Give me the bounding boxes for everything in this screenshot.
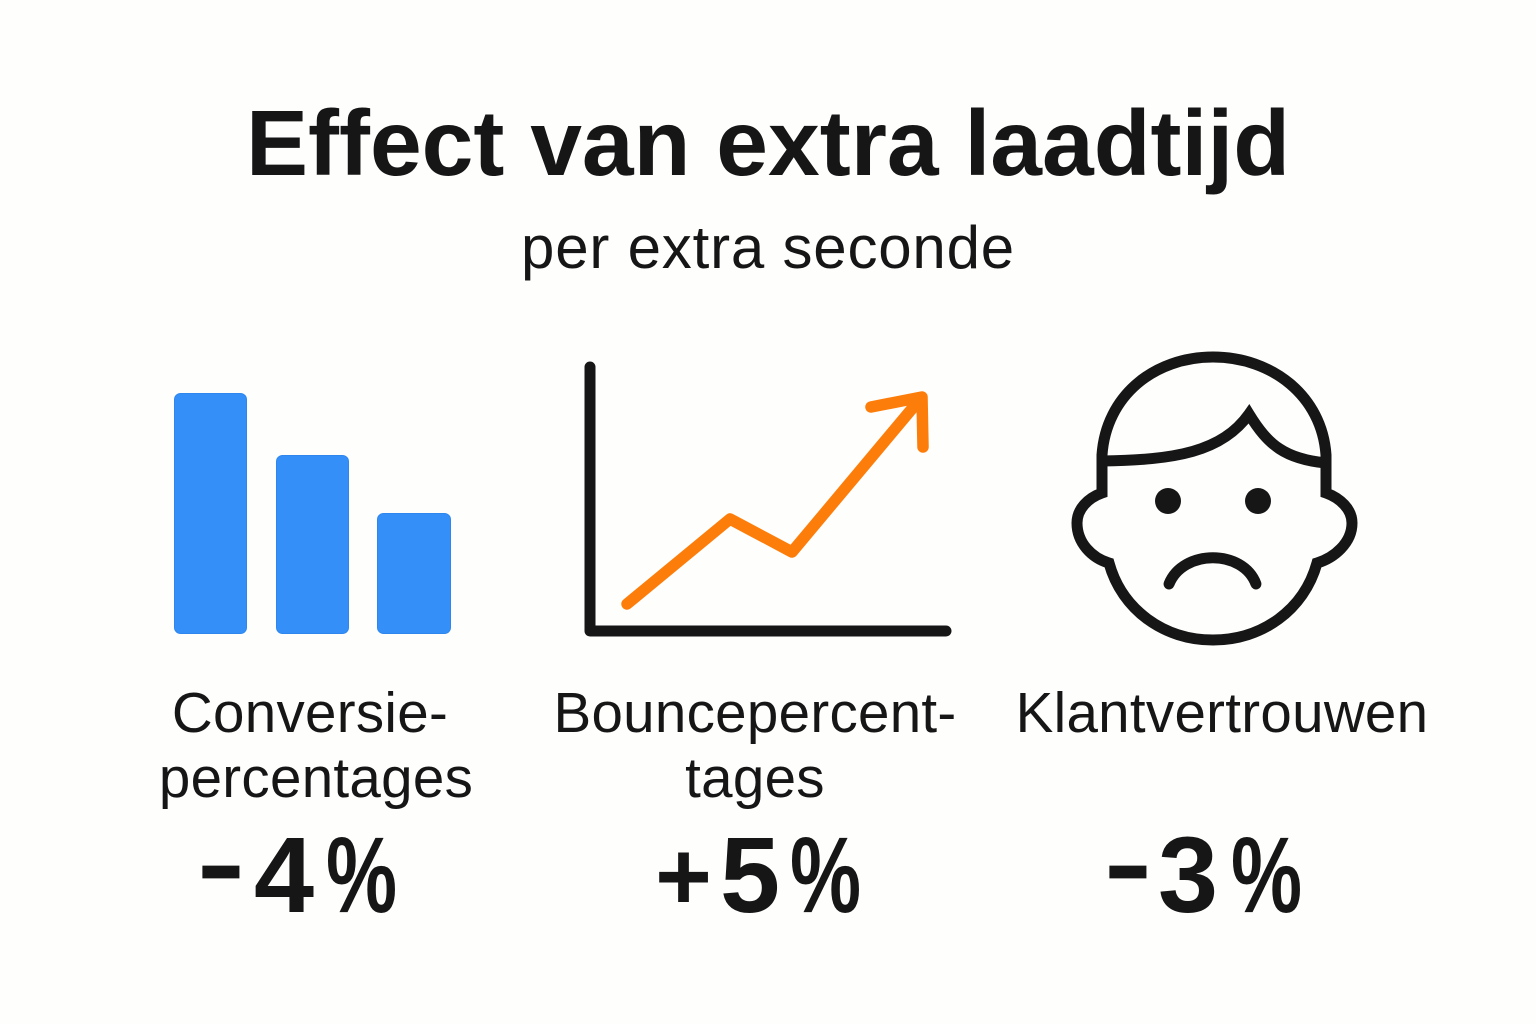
label: bounce: tages [685,746,825,809]
label: trust: Klantvertrouwen [1016,681,1428,744]
label: conversion [159,681,473,809]
label: bounce: Bouncepercent- [553,681,957,744]
value: conversion: % [326,814,397,935]
value: trust: 3 [1158,814,1218,935]
value: bounce [655,814,861,935]
value: bounce: % [790,814,861,935]
value: conversion: 4 [254,814,314,935]
value: bounce: + [655,821,712,930]
title: Effect van extra laadtijd [246,91,1290,195]
icon: bar chart [174,393,451,634]
label: conversion: percentages [159,746,473,809]
value: trust: % [1231,814,1302,935]
icon: sad face [1072,352,1358,646]
label: bounce [553,681,957,809]
subtitle: per extra seconde [521,214,1015,281]
value: trust [1104,802,1302,935]
label: conversion: Conversie- [172,681,448,744]
value: conversion: - [197,802,245,923]
icon: line chart with rising arrow [584,362,952,636]
value: bounce: 5 [720,814,780,935]
value: conversion [197,802,397,935]
value: trust: - [1104,802,1152,923]
